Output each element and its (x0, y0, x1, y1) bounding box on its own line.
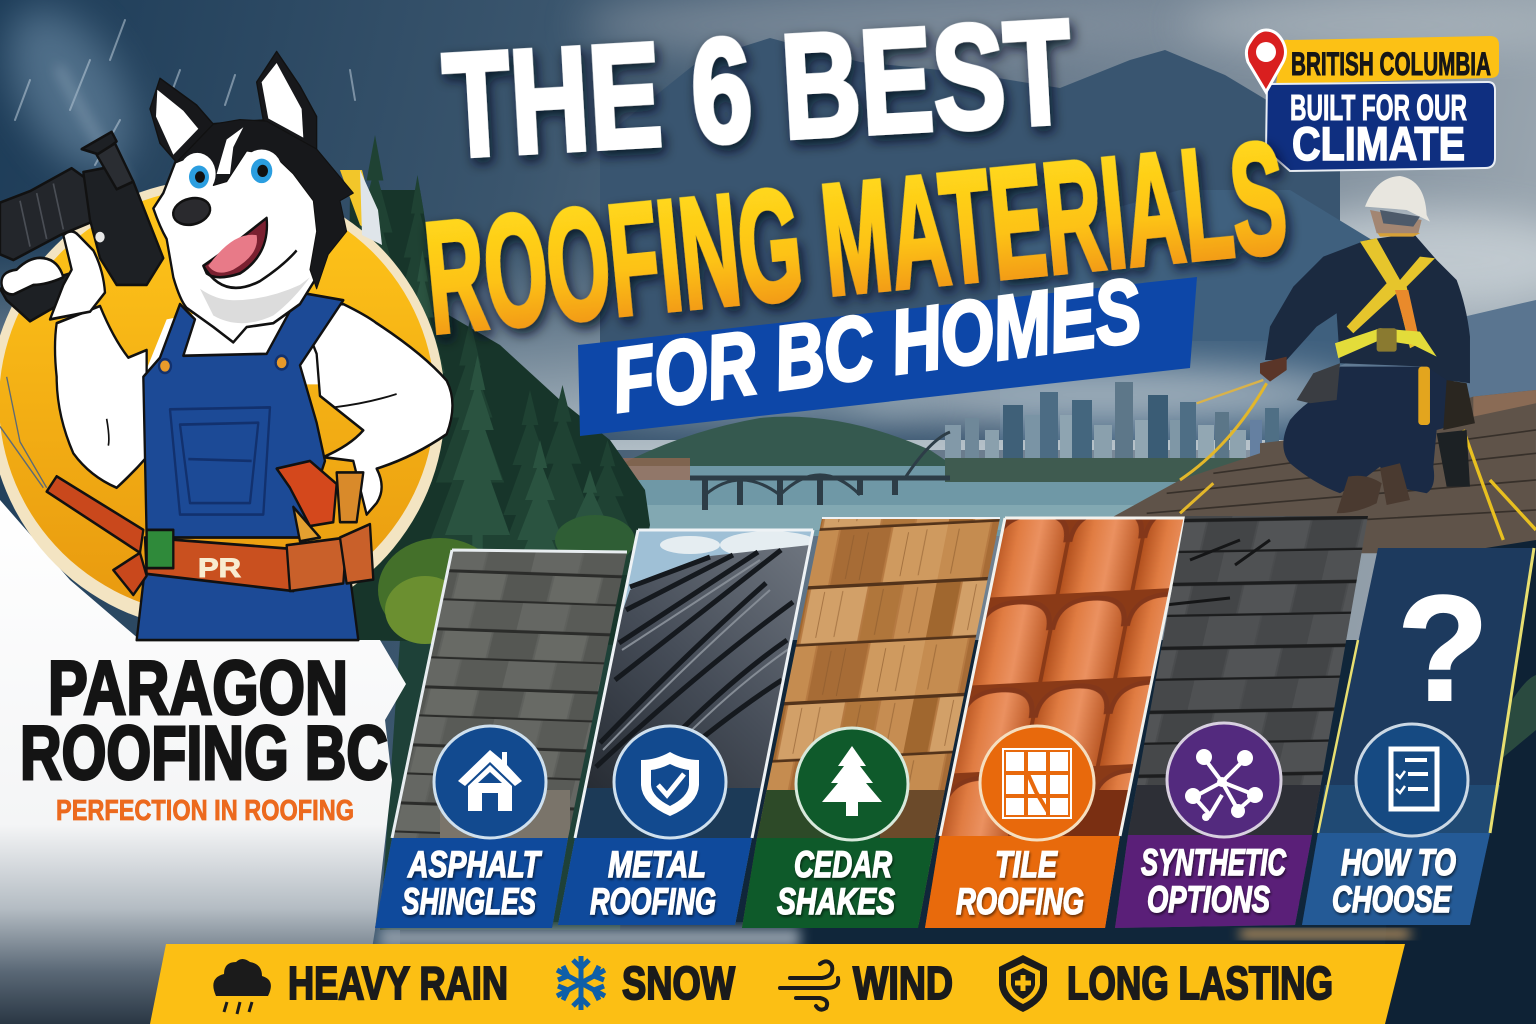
panel: cedar shakes (735, 515, 1005, 935)
yellow circle badge (0, 170, 445, 631)
blue climate box (1266, 82, 1495, 171)
panel: how to choose (1302, 548, 1534, 925)
brand text block: PERFECTION IN ROOFING (56, 795, 354, 827)
label (375, 838, 568, 928)
icon: house (434, 726, 546, 838)
synthetic photo (1110, 514, 1375, 934)
icon: map pin (1246, 30, 1286, 92)
distant hills, water (600, 417, 1300, 536)
left fog panel (0, 500, 406, 1024)
asphalt photo (375, 552, 627, 928)
bottom yellow band (150, 944, 1405, 1024)
city skyline (945, 382, 1285, 482)
label: heavy rain: HEAVY RAIN (288, 957, 508, 1009)
icon: tree (796, 728, 908, 840)
bridge (620, 432, 950, 510)
label: ROOFING (956, 881, 1084, 922)
label: METAL (608, 844, 706, 885)
brand text block: ROOFING BC (20, 711, 388, 796)
label: SHAKES (777, 881, 895, 922)
icon: molecule network (1167, 723, 1281, 837)
label (742, 838, 935, 928)
label: long lasting: LONG LASTING (1067, 957, 1333, 1009)
label (1115, 835, 1312, 928)
rain streaks (15, 20, 355, 180)
panel: asphalt shingles (370, 545, 640, 935)
label (558, 838, 752, 925)
title block (418, 0, 1293, 436)
label (1302, 833, 1490, 925)
forest (340, 135, 650, 645)
worker on roof (1180, 176, 1536, 540)
icon: shield (999, 955, 1047, 1012)
panel: tile roofing (920, 515, 1190, 935)
blue subtitle banner (578, 261, 1197, 436)
yellow location tag (1276, 36, 1499, 84)
label: wind: WIND (853, 957, 953, 1009)
panel: synthetic options (1110, 514, 1375, 934)
icon: snowflake (557, 956, 605, 1010)
tile photo (920, 515, 1190, 935)
label: SYNTHETIC (1141, 842, 1287, 883)
label: CHOOSE (1332, 879, 1452, 920)
icon: wind (780, 961, 838, 1010)
metal photo (550, 525, 820, 930)
icon: tile grid (980, 726, 1094, 840)
brand text block: PARAGON (48, 646, 348, 731)
label: SHINGLES (402, 881, 536, 922)
icon: checklist (1356, 724, 1468, 836)
label: HOW TO (1341, 842, 1456, 883)
label: snow: SNOW (622, 957, 735, 1009)
badge: British Columbia (1246, 30, 1499, 171)
brand text block (20, 646, 388, 827)
label: OPTIONS (1147, 879, 1270, 920)
blue climate box: CLIMATE (1292, 117, 1465, 170)
cedar photo (735, 515, 1005, 935)
mascot: husky roofer (0, 51, 452, 640)
belt badge PR: PR (198, 553, 241, 583)
dark lower background (380, 540, 1536, 1024)
label: TILE (995, 844, 1058, 885)
icon: shield (614, 726, 726, 838)
icon: rain cloud (213, 959, 271, 1014)
label: CEDAR (794, 844, 892, 885)
label: ASPHALT (407, 844, 543, 885)
label (925, 836, 1120, 928)
blue subtitle banner: FOR BC HOMES (606, 261, 1147, 432)
panel: metal roofing (550, 525, 820, 930)
mountains (590, 38, 1536, 440)
roof under worker (1113, 390, 1536, 553)
husky figure (0, 51, 452, 640)
label: ROOFING (590, 881, 716, 922)
question mark: ? (1397, 564, 1489, 732)
